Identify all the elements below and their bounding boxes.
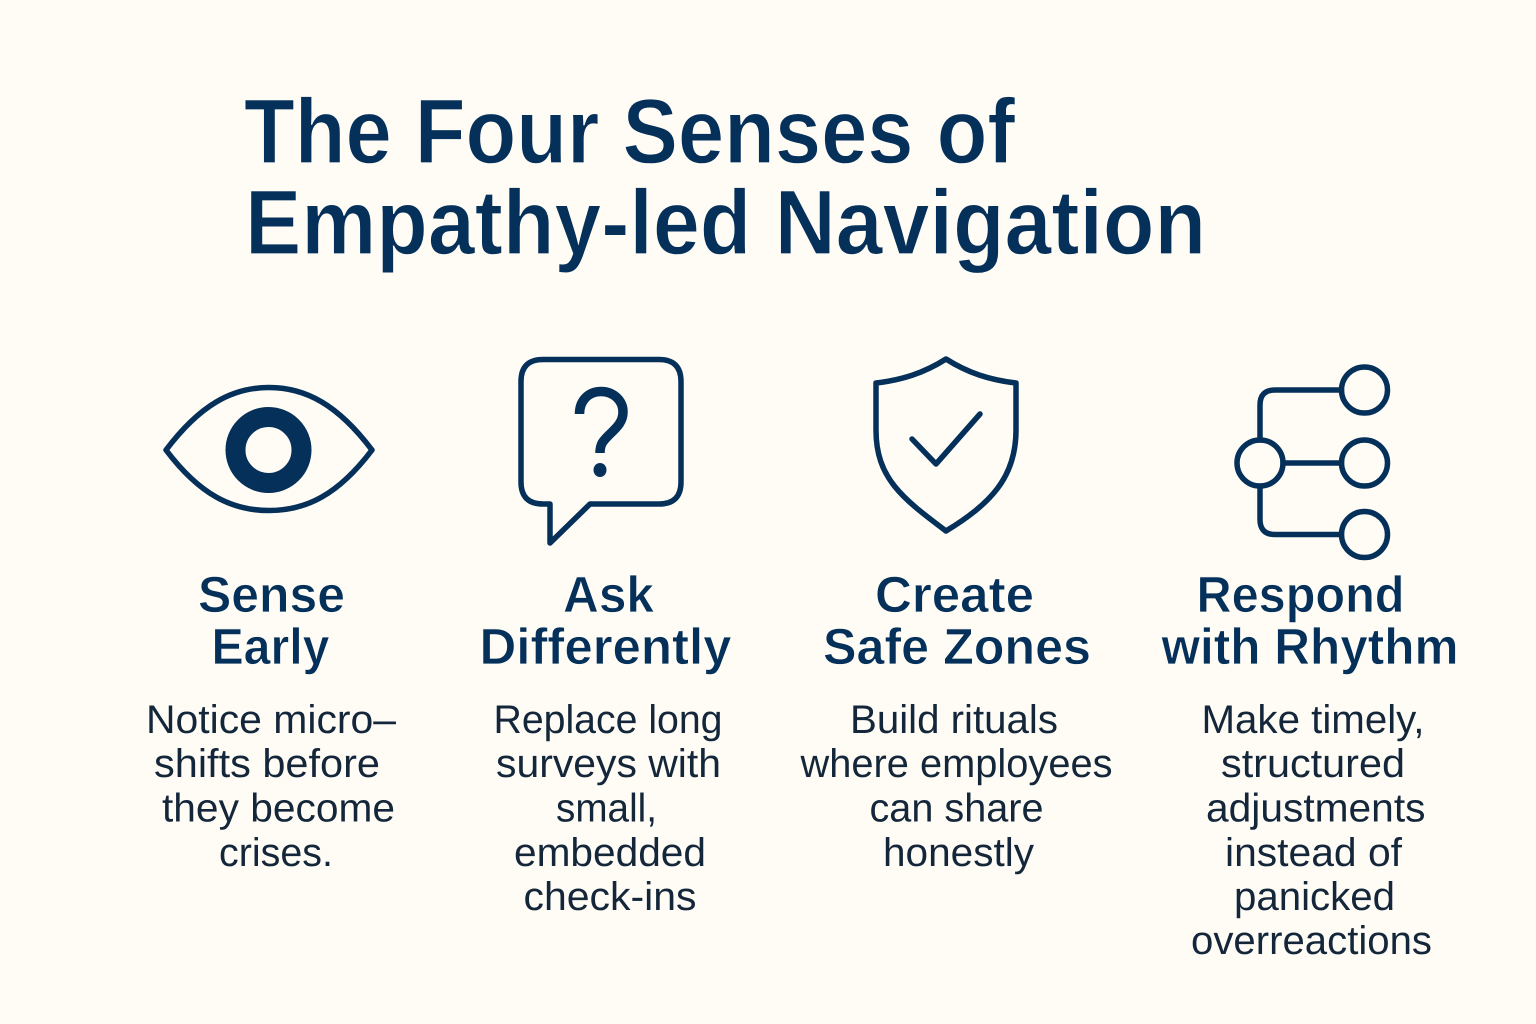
heading: Create Safe Zones: Safe Zones: [823, 618, 1091, 675]
panel: Ask Differently: [480, 360, 732, 919]
text: Respond with Rhythm description: instead of: [1225, 831, 1403, 875]
text: Respond with Rhythm description: [1191, 698, 1432, 963]
text: Create Safe Zones description: honestly: [883, 831, 1034, 875]
heading: Ask Differently: [480, 566, 732, 675]
text: Respond with Rhythm description: overreactions: [1191, 919, 1432, 963]
text: Respond with Rhythm description: panicked: [1234, 875, 1395, 919]
heading: Respond with Rhythm: with Rhythm: [1161, 618, 1458, 675]
heading: Create Safe Zones: [823, 566, 1091, 675]
text: Sense Early description: shifts before: [154, 742, 380, 786]
text: Ask Differently description: [494, 698, 722, 919]
title: [244, 81, 1206, 274]
text: Respond with Rhythm description: Make timely,: [1202, 698, 1424, 742]
icon: shield with check: [876, 359, 1016, 531]
text: Sense Early description: crises.: [219, 831, 333, 875]
heading: Sense Early: Sense: [198, 566, 345, 623]
icon: eye: [166, 388, 372, 510]
text: Ask Differently description: small,: [556, 786, 657, 830]
text: Sense Early description: Notice micro–: [146, 698, 397, 742]
text: Ask Differently description: embedded: [514, 831, 706, 875]
icon: branching nodes: [1237, 367, 1388, 558]
heading: Create Safe Zones: Create: [875, 566, 1034, 623]
title: The Four Senses of: [244, 81, 1015, 183]
text: Create Safe Zones description: where employees: [800, 742, 1112, 786]
heading: Respond with Rhythm: [1161, 566, 1458, 675]
text: Create Safe Zones description: [800, 698, 1112, 875]
heading: Respond with Rhythm: Respond: [1196, 566, 1404, 623]
text: Ask Differently description: check-ins: [524, 875, 696, 919]
text: Ask Differently description: Replace long: [494, 698, 722, 742]
heading: Ask Differently: Ask: [563, 566, 655, 623]
panel: Create Safe Zones: [800, 359, 1112, 875]
text: Respond with Rhythm description: structured: [1221, 742, 1405, 786]
panel: Respond with Rhythm: [1161, 367, 1458, 963]
heading: Sense Early: Early: [212, 618, 330, 675]
title: Empathy-led Navigation: [245, 172, 1206, 274]
text: Ask Differently description: surveys with: [496, 742, 721, 786]
panel: Sense Early: [146, 388, 397, 875]
text: Create Safe Zones description: Build rituals: [850, 698, 1058, 742]
text: Create Safe Zones description: can share: [870, 786, 1044, 830]
heading: Ask Differently: Differently: [480, 618, 732, 675]
text: Sense Early description: they become: [162, 786, 395, 830]
heading: Sense Early: [198, 566, 345, 675]
text: Respond with Rhythm description: adjustments: [1206, 786, 1426, 830]
icon: question speech bubble: [521, 360, 681, 543]
text: Sense Early description: [146, 698, 397, 875]
